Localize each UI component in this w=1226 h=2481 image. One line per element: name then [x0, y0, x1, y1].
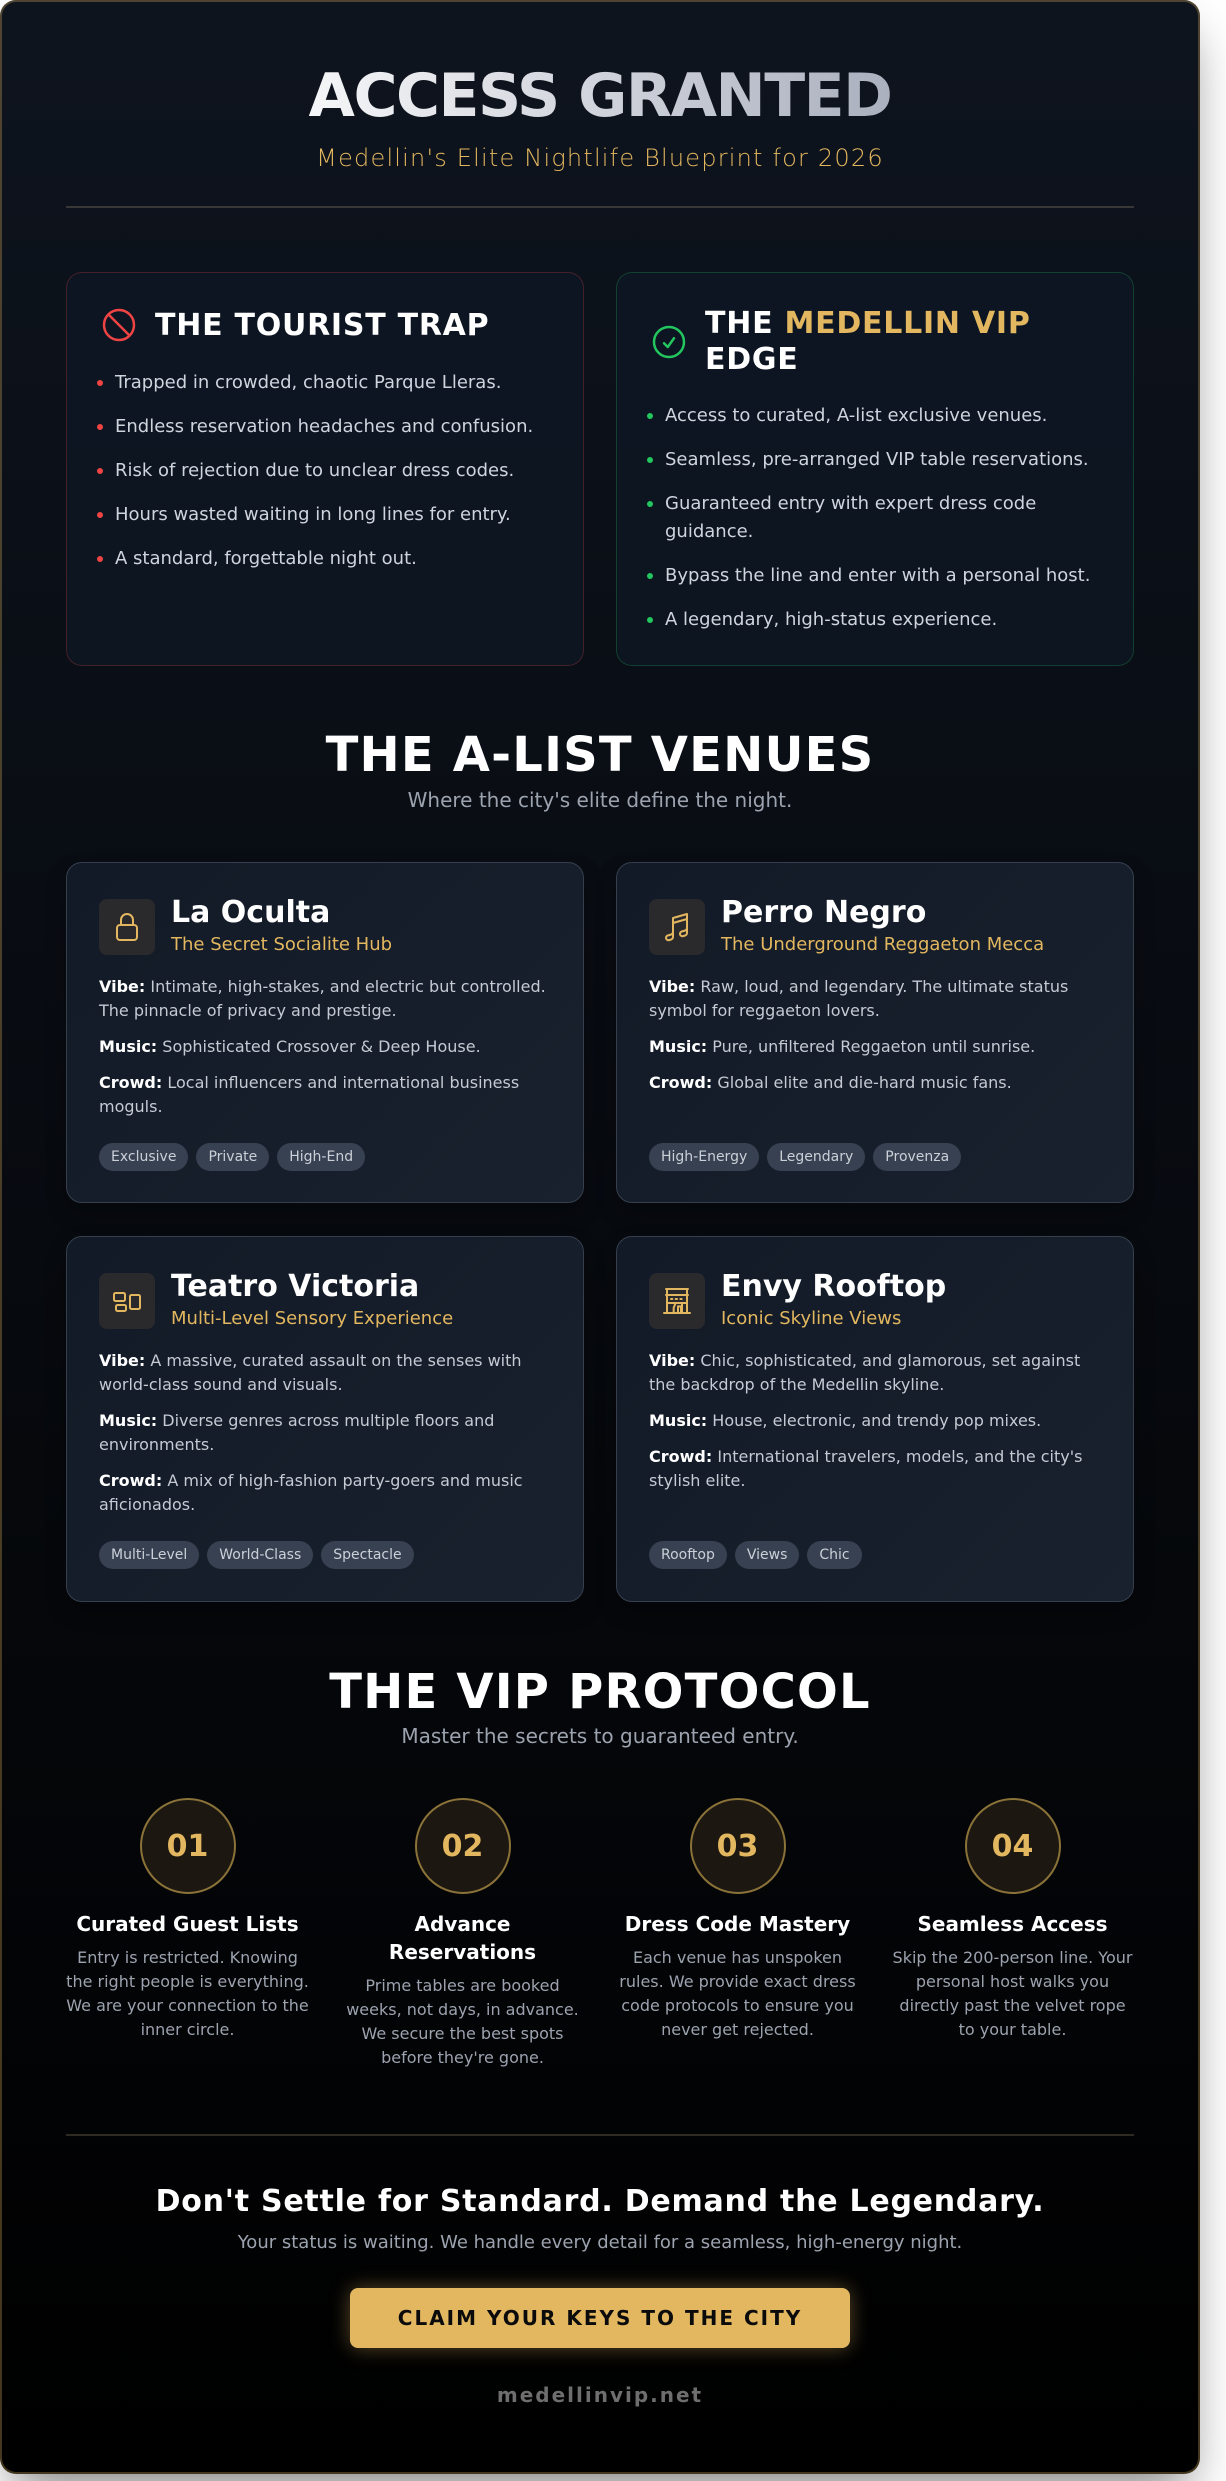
number badge 03: 03 — [717, 1828, 758, 1864]
icon: no symbol — [102, 308, 136, 342]
tags: teatro victoria — [99, 1541, 414, 1569]
list: vip benefits: guidance. — [665, 521, 753, 542]
heading: the a-list venues: THE A-LIST VENUES — [326, 727, 874, 783]
venue details: envy rooftop: Music: House, electronic, and trendy pop mixes. — [649, 1411, 1041, 1430]
step 01: Entry is restricted. Knowing — [77, 1948, 298, 1967]
subheading: venues: Where the city's elite define the night. — [408, 788, 792, 812]
venue details: perro negro: Crowd: Global elite and die-hard music fans. — [649, 1073, 1012, 1092]
tags: envy rooftop: Views — [747, 1547, 787, 1563]
list: tourist problems: Trapped in crowded, chaotic Parque Lleras. — [115, 372, 501, 393]
panel: the tourist trap — [66, 272, 584, 666]
step 04: directly past the velvet rope — [899, 1996, 1126, 2015]
venue details: perro negro: Music: Pure, unfiltered Reggaeton until sunrise. — [649, 1037, 1035, 1056]
step 02: weeks, not days, in advance. — [346, 2000, 579, 2019]
venue details: teatro victoria: environments. — [99, 1435, 214, 1454]
step 02 — [346, 1798, 579, 2067]
card header: la oculta: La Oculta — [171, 895, 330, 930]
step 03: never get rejected. — [661, 2020, 814, 2039]
venue details: teatro victoria: world-class sound and visuals. — [99, 1375, 343, 1394]
footer url: medellinvip.net — [497, 2383, 703, 2407]
list: vip benefits: Bypass the line and enter with a personal host. — [665, 565, 1090, 586]
tags: teatro victoria: Spectacle — [333, 1547, 402, 1563]
list: vip benefits: A legendary, high-status experience. — [665, 609, 997, 630]
list: tourist problems: Risk of rejection due to unclear dress codes. — [115, 460, 514, 481]
number badge 01 — [140, 1798, 236, 1894]
venue details: envy rooftop: Vibe: Chic, sophisticated, and glamorous, set against — [649, 1351, 1080, 1370]
list: tourist problems — [97, 372, 533, 569]
step 02: We secure the best spots — [361, 2024, 564, 2043]
venue details: la oculta — [98, 977, 546, 1116]
number badge 01: 01 — [167, 1828, 208, 1864]
card: teatro victoria — [66, 1236, 584, 1602]
tags: envy rooftop: Rooftop — [661, 1547, 715, 1563]
venue details: teatro victoria: Music: Diverse genres across multiple floors and — [99, 1411, 494, 1430]
icon: building — [649, 1273, 705, 1329]
list: vip benefits: Access to curated, A-list exclusive venues. — [665, 405, 1047, 426]
card: la oculta — [66, 862, 584, 1203]
number badge 02: 02 — [442, 1828, 483, 1864]
number badge 04: 04 — [992, 1828, 1033, 1864]
step 02: Prime tables are booked — [365, 1976, 560, 1995]
list: vip benefits: Seamless, pre-arranged VIP table reservations. — [665, 449, 1089, 470]
tags: la oculta: High-End — [289, 1149, 353, 1165]
step 04 — [893, 1798, 1132, 2039]
step 01: We are your connection to the — [66, 1996, 309, 2015]
step 03 — [619, 1798, 856, 2039]
venue details: la oculta: The pinnacle of privacy and prestige. — [99, 1001, 397, 1020]
card header: perro negro: The Underground Reggaeton Mecca — [721, 934, 1044, 955]
step 02: before they're gone. — [381, 2048, 544, 2067]
venue details: envy rooftop: Crowd: International travelers, models, and the city's — [649, 1447, 1082, 1466]
tags: envy rooftop: Chic — [819, 1547, 850, 1563]
card header: envy rooftop: Envy Rooftop — [721, 1269, 946, 1304]
step 02: Advance — [414, 1912, 510, 1936]
card header: teatro victoria: Teatro Victoria — [171, 1269, 419, 1304]
venue details: la oculta: Vibe: Intimate, high-stakes, and electric but controlled. — [99, 977, 546, 996]
venue details: teatro victoria: aficionados. — [99, 1495, 195, 1514]
step 01 — [66, 1798, 309, 2039]
step 03: rules. We provide exact dress — [619, 1972, 856, 1991]
tags: perro negro: Legendary — [779, 1149, 853, 1165]
step 03: code protocols to ensure you — [621, 1996, 854, 2015]
panel heading: tourist trap: THE TOURIST TRAP — [155, 308, 489, 342]
list: tourist problems: Endless reservation headaches and confusion. — [115, 416, 533, 437]
tags: envy rooftop — [649, 1541, 862, 1569]
step 03: Dress Code Mastery — [625, 1912, 850, 1936]
button: claim your keys: CLAIM YOUR KEYS TO THE CITY — [398, 2306, 802, 2330]
venue details: envy rooftop: the backdrop of the Medellin skyline. — [649, 1375, 944, 1394]
number badge 02 — [414, 1798, 510, 1894]
step 04: Skip the 200-person line. Your — [893, 1948, 1132, 1967]
card: perro negro — [616, 862, 1134, 1203]
venue details: la oculta: moguls. — [99, 1097, 163, 1116]
card header: teatro victoria: Multi-Level Sensory Experience — [171, 1308, 453, 1329]
tags: la oculta: Exclusive — [111, 1149, 176, 1165]
number badge 03 — [690, 1798, 786, 1894]
step 03: Each venue has unspoken — [633, 1948, 842, 1967]
step 01: inner circle. — [141, 2020, 234, 2039]
card header: perro negro — [649, 895, 1044, 955]
card header: la oculta: The Secret Socialite Hub — [171, 934, 392, 955]
step 01: the right people is everything. — [66, 1972, 309, 1991]
step 04: personal host walks you — [916, 1972, 1109, 1991]
tags: la oculta — [99, 1143, 365, 1171]
venue details: la oculta: Music: Sophisticated Crossover & Deep House. — [99, 1037, 481, 1056]
icon: music note — [649, 899, 705, 955]
card header: perro negro: Perro Negro — [721, 895, 926, 930]
tags: la oculta: Private — [208, 1149, 257, 1165]
tags: perro negro: High-Energy — [661, 1149, 747, 1165]
tags: teatro victoria: Multi-Level — [111, 1547, 187, 1563]
card header: envy rooftop — [649, 1269, 946, 1329]
tags: perro negro: Provenza — [885, 1149, 949, 1165]
step 04: to your table. — [959, 2020, 1066, 2039]
list: tourist problems: A standard, forgettable night out. — [115, 548, 417, 569]
step 01: Curated Guest Lists — [76, 1912, 299, 1936]
tags: perro negro — [649, 1143, 961, 1171]
venue details: perro negro: symbol for reggaeton lovers. — [649, 1001, 880, 1020]
list: vip benefits — [647, 405, 1090, 630]
heading: the vip protocol: THE VIP PROTOCOL — [329, 1664, 871, 1720]
venue details: perro negro — [649, 977, 1068, 1092]
venue details: perro negro: Vibe: Raw, loud, and legendary. The ultimate status — [649, 977, 1068, 996]
panel: the medellin vip edge — [616, 272, 1134, 666]
card: envy rooftop — [616, 1236, 1134, 1602]
venue details: teatro victoria: Vibe: A massive, curated assault on the senses with — [99, 1351, 522, 1370]
panel heading: vip edge: EDGE — [705, 342, 799, 377]
subtitle: Medellin's Elite Nightlife Blueprint for 2026 — [316, 144, 884, 172]
call to action heading: Don't Settle for Standard. Demand the Legendary. — [156, 2184, 1044, 2219]
icon: lock — [99, 899, 155, 955]
number badge 04 — [964, 1798, 1060, 1894]
venue details: la oculta: Crowd: Local influencers and international business — [99, 1073, 519, 1092]
card header: envy rooftop: Iconic Skyline Views — [721, 1308, 901, 1329]
icon: rectangle group — [99, 1273, 155, 1329]
card header: la oculta — [99, 895, 392, 955]
card header: teatro victoria — [99, 1269, 453, 1329]
venue details: teatro victoria — [99, 1351, 523, 1514]
tags: teatro victoria: World-Class — [219, 1547, 301, 1563]
venue details: envy rooftop — [649, 1351, 1082, 1490]
step 04: Seamless Access — [917, 1912, 1108, 1936]
icon: check circle — [652, 326, 686, 358]
list: vip benefits: Guaranteed entry with expert dress code — [665, 493, 1036, 514]
panel heading: vip edge: THE MEDELLIN VIP — [705, 306, 1031, 341]
venue details: teatro victoria: Crowd: A mix of high-fashion party-goers and music — [99, 1471, 523, 1490]
step 02: Reservations — [389, 1940, 536, 1964]
button: claim your keys — [350, 2288, 850, 2348]
title: ACCESS GRANTED — [309, 61, 891, 131]
panel heading: vip edge — [652, 306, 1031, 377]
call to action subtext: Your status is waiting. We handle every detail for a seamless, high-energy night. — [238, 2232, 962, 2253]
venue details: envy rooftop: stylish elite. — [649, 1471, 745, 1490]
subheading: protocol: Master the secrets to guaranteed entry. — [401, 1724, 799, 1748]
list: tourist problems: Hours wasted waiting in long lines for entry. — [115, 504, 511, 525]
